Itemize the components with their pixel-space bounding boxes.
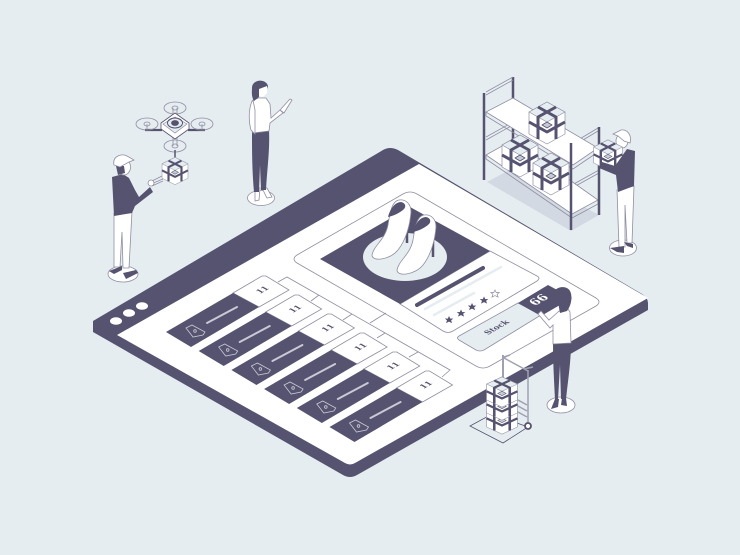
top shelf	[486, 98, 598, 165]
name bar	[338, 383, 368, 399]
cap	[114, 155, 134, 167]
lower shelf	[486, 140, 598, 214]
trousers	[553, 342, 571, 400]
head	[616, 134, 628, 148]
list connector rails	[278, 277, 450, 377]
drone camera	[168, 118, 182, 128]
window page surface	[117, 164, 648, 464]
product image panel	[320, 200, 490, 304]
list row 6	[330, 371, 452, 442]
stock cell	[233, 276, 289, 307]
stacked boxes	[487, 377, 517, 434]
description bars	[425, 267, 501, 315]
stock label: Stock	[481, 318, 512, 336]
hand with remote	[148, 180, 154, 186]
dark row	[166, 293, 259, 347]
list row 4	[264, 333, 387, 404]
cap	[613, 130, 631, 143]
box on lower shelf right	[533, 153, 569, 195]
head	[118, 159, 130, 175]
name bar	[370, 402, 400, 418]
card outline	[400, 251, 539, 332]
remote beam	[150, 176, 163, 186]
person: warehouse worker with box	[594, 130, 636, 256]
person: woman at screen	[538, 287, 575, 413]
drone parcel	[162, 157, 188, 185]
shoes	[109, 266, 138, 279]
list row 2	[199, 295, 322, 366]
carried box	[594, 140, 622, 170]
stock button	[458, 303, 541, 351]
stock cell	[298, 314, 354, 345]
front handle and bars	[504, 355, 533, 423]
torso	[599, 149, 635, 192]
tag icon	[284, 382, 303, 394]
person: woman with tablet	[248, 81, 292, 206]
window control dots	[110, 302, 148, 325]
name bar	[240, 326, 270, 342]
stock cell	[331, 333, 387, 364]
hair	[252, 81, 268, 101]
display plate	[363, 233, 447, 281]
stock cell	[396, 371, 452, 402]
heels	[551, 398, 567, 409]
trousers	[252, 130, 269, 192]
list row 1	[166, 276, 289, 347]
shelf shadow	[487, 168, 599, 231]
dark row	[231, 331, 324, 385]
stock cell	[266, 295, 322, 326]
bottom box	[487, 404, 517, 434]
tag icon	[186, 325, 205, 337]
trousers	[617, 186, 634, 247]
window base	[93, 148, 648, 477]
rotor masts	[147, 108, 202, 146]
rotors	[136, 102, 213, 152]
name bar	[207, 307, 237, 323]
stock value: 11	[253, 284, 271, 295]
browser window	[93, 148, 648, 477]
shelf unit	[484, 77, 599, 231]
stock value: 11	[384, 360, 402, 371]
front posts	[571, 127, 599, 230]
trousers	[114, 211, 132, 268]
list row 3	[231, 314, 354, 385]
name bar	[272, 345, 302, 361]
tag number: 66	[525, 292, 552, 308]
platform	[470, 414, 528, 443]
tablet	[280, 99, 292, 113]
base	[248, 190, 274, 206]
tag icon	[219, 344, 238, 356]
base	[610, 240, 636, 256]
stock value: 11	[417, 379, 435, 390]
star rating	[445, 290, 499, 323]
torso	[112, 174, 153, 216]
person: drone operator	[108, 155, 163, 282]
hair	[116, 166, 125, 175]
base	[547, 397, 575, 413]
stock value: 11	[286, 303, 304, 314]
rear posts	[484, 77, 513, 180]
right high heel	[397, 215, 436, 274]
dark row	[297, 369, 390, 423]
face	[259, 86, 267, 97]
shoes	[610, 242, 633, 253]
dark row	[330, 388, 422, 442]
top box	[487, 377, 517, 407]
tag icon	[317, 401, 336, 413]
dark row	[199, 312, 292, 366]
left arm	[249, 100, 255, 134]
left high heel	[372, 200, 411, 259]
stock cell	[364, 352, 420, 383]
top shelf edge	[486, 112, 598, 169]
tether	[174, 150, 176, 160]
torso and arm	[250, 98, 283, 133]
name bar	[305, 364, 335, 380]
dark image background	[320, 207, 490, 304]
side rails	[486, 77, 599, 188]
stock value: 11	[318, 322, 337, 333]
torso and arm	[538, 306, 571, 344]
discount tag	[518, 285, 572, 316]
product details card	[400, 251, 539, 332]
box on lower shelf left	[502, 135, 538, 177]
middle box	[487, 390, 517, 420]
body plate	[163, 117, 187, 133]
wheel	[525, 423, 531, 429]
list row 5	[297, 352, 420, 423]
product panel outline	[294, 192, 599, 368]
hair	[552, 287, 571, 313]
stock value: 11	[351, 341, 369, 352]
box on top shelf	[529, 102, 565, 144]
rear handle	[502, 355, 504, 387]
drone arms	[145, 129, 205, 131]
title bar	[417, 268, 483, 305]
drone body	[161, 113, 189, 139]
hand truck with boxes	[470, 355, 533, 443]
tag icon	[350, 420, 368, 432]
drone	[136, 102, 213, 185]
tag icon	[251, 363, 270, 375]
dark row	[264, 350, 357, 404]
lower shelf edge	[486, 155, 598, 218]
base	[108, 266, 138, 282]
shoes	[255, 188, 272, 201]
